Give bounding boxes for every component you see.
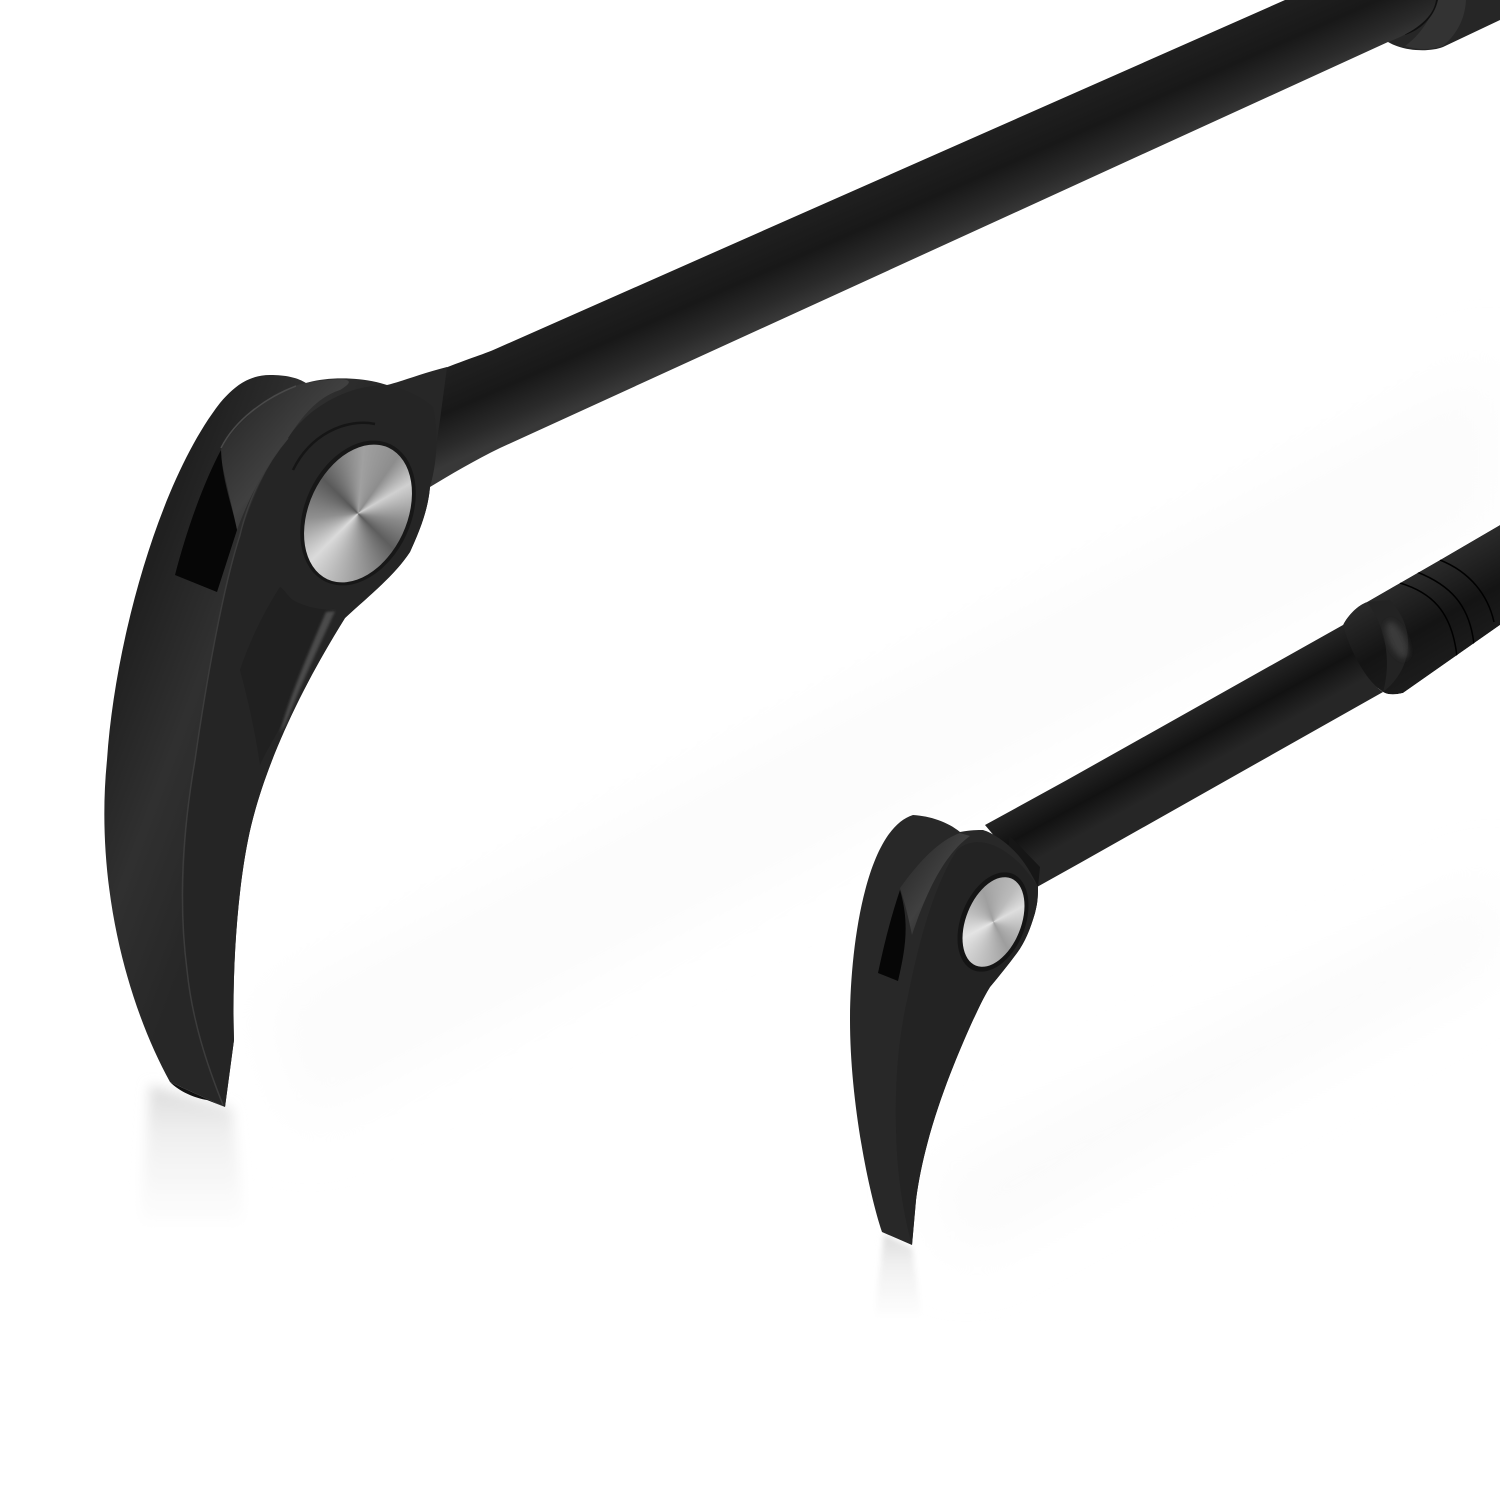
floor reflections bbox=[140, 360, 1500, 1320]
small head: slot bbox=[878, 890, 906, 981]
large head: front plate bbox=[184, 385, 436, 1107]
large head: disc recess bbox=[278, 422, 438, 604]
small bar: head bbox=[850, 815, 1042, 1245]
large head: tip bevel bbox=[170, 1082, 225, 1107]
small bar: grip bbox=[1340, 525, 1500, 694]
large steel disc bbox=[283, 427, 433, 600]
large bar: handle collar bbox=[1388, 0, 1500, 50]
small head: central wheel bbox=[900, 833, 970, 935]
large bar: shaft bbox=[400, 0, 1436, 487]
large pry bar bbox=[104, 0, 1500, 1107]
large head: blade ridge line bbox=[182, 438, 288, 1105]
large bar: head bbox=[104, 367, 447, 1107]
small head: disc recess bbox=[944, 862, 1042, 982]
large head: central wheel bbox=[220, 379, 349, 530]
small head: body outline bbox=[850, 815, 1038, 1245]
small head: shaft notch bbox=[1009, 835, 1040, 887]
large head: boss groove bbox=[293, 423, 375, 470]
small steel disc bbox=[950, 868, 1037, 976]
large head: slot bbox=[175, 450, 237, 592]
large head: recess highlight bbox=[280, 611, 335, 733]
small pry bar bbox=[850, 525, 1500, 1245]
large head: rear lobe crease bbox=[221, 386, 296, 448]
large head: blade recess bbox=[240, 587, 335, 765]
small bar: shaft bbox=[985, 625, 1383, 887]
large head: body outline bbox=[104, 367, 447, 1107]
small head: front plate bbox=[896, 842, 1038, 1245]
